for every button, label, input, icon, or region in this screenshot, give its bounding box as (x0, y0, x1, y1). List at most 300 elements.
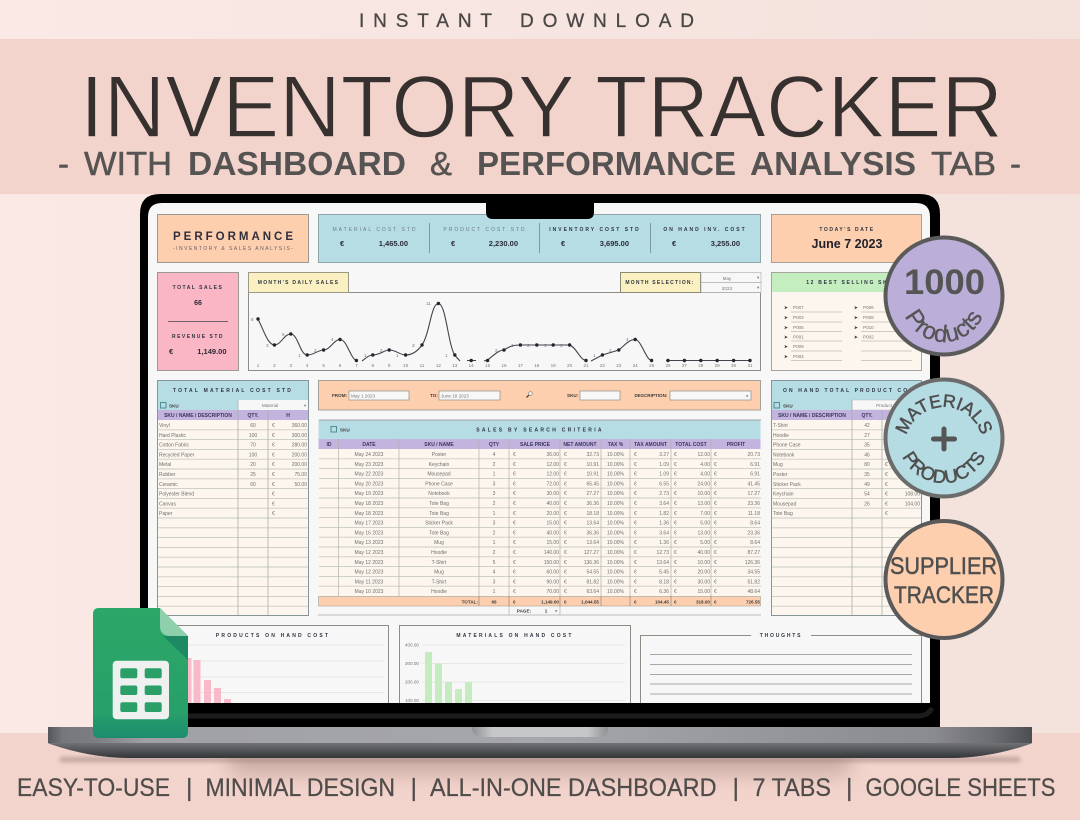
line chart: 8 (372, 363, 375, 368)
panel: on hand total product cost table: € (885, 472, 888, 478)
badge: materials + products: MATERIALS (895, 394, 992, 434)
table body rows: 10.00% (607, 550, 625, 556)
feature strip (17, 774, 1056, 802)
line chart: 30 (731, 363, 737, 368)
badge: materials + products: PRODUCTS (902, 450, 984, 483)
table body rows (355, 452, 760, 595)
table body rows: 3.27 (659, 452, 669, 458)
panel: on hand total product cost table: Notebook (773, 452, 795, 458)
table body rows: € (513, 570, 516, 576)
panel: performance title (158, 214, 308, 262)
table body rows: € (674, 570, 677, 576)
line chart: 14 (469, 363, 474, 368)
panel: on hand total product cost table: 35 (864, 472, 870, 478)
line chart: 26 (665, 363, 671, 368)
panel: materials on hand cost chart: 300.00 (405, 661, 419, 666)
table body rows: 2 (493, 550, 496, 556)
panel: search filters: TO: (430, 393, 438, 398)
table body rows: € (674, 472, 677, 478)
table body rows: May 17 2023 (355, 521, 384, 527)
panel: on hand total product cost table: Mousepad (773, 501, 797, 507)
badge: 1000 products: Products (905, 308, 982, 342)
table body rows: 4 (493, 452, 496, 458)
panel: total material cost table: TOTAL MATERIAL COST STD (173, 388, 293, 394)
table body rows: 3.64 (659, 530, 669, 536)
panel: total material cost table: Cotton Fabric (159, 443, 190, 449)
feature strip: GOOGLE SHEETS (866, 774, 1056, 802)
line chart: 10 (403, 363, 409, 368)
panel: total material cost table: € (272, 501, 275, 507)
line chart: 12 (436, 363, 441, 368)
line chart: 3 (527, 343, 530, 348)
feature strip: | (186, 774, 192, 802)
line chart: 21 (583, 363, 589, 368)
table body rows: 127.27 (584, 550, 599, 556)
table body rows: 1 (493, 472, 496, 478)
table body rows: 3 (493, 521, 496, 527)
table body rows: 3 (493, 481, 496, 487)
table body rows: € (634, 570, 637, 576)
table body rows: 10.00% (607, 511, 625, 517)
table body rows: 12.00 (697, 452, 710, 458)
table totals row: € (674, 600, 677, 604)
panel: on hand total product cost table: € (885, 462, 888, 468)
table body rows: 136.36 (584, 560, 599, 566)
table body rows: € (674, 530, 677, 536)
table body rows: 40.00 (697, 550, 710, 556)
table body rows: € (714, 452, 717, 458)
table body rows: 2.73 (659, 491, 669, 497)
table body rows: 10.00% (607, 472, 625, 478)
badge: 1000 products: 1000 (904, 263, 985, 302)
table body rows: 1 (493, 589, 496, 595)
line chart: 2 (273, 363, 276, 368)
table body rows: € (674, 589, 677, 595)
table body rows: € (714, 511, 717, 517)
panel: cost summary: € (561, 239, 566, 248)
table body rows: € (634, 530, 637, 536)
panel: on hand total product cost table: Mug (773, 462, 783, 468)
line chart: 5 (322, 363, 325, 368)
table body rows: 13.00 (697, 501, 710, 507)
table body rows: May 16 2023 (355, 530, 384, 536)
table body rows: € (513, 462, 516, 468)
table body rows: May 24 2023 (355, 452, 384, 458)
line chart: 4 (306, 363, 309, 368)
table body rows: 3 (493, 579, 496, 585)
subtitle: DASHBOARD (188, 145, 406, 182)
panel: on hand total product cost table: Product (876, 403, 893, 408)
panel: best selling skus: ➤ (784, 354, 789, 359)
panel: total material cost table: 25 (250, 472, 256, 478)
table body rows: 12.00 (546, 472, 559, 478)
table body rows: 54.55 (586, 570, 599, 576)
table body rows: 5.45 (659, 570, 669, 576)
line chart: 2 (380, 348, 383, 353)
table body rows: € (674, 501, 677, 507)
panel: best selling skus: ➤ (854, 315, 859, 320)
panel: total sales: 1,149.00 (197, 347, 226, 356)
line chart: 2 (314, 348, 317, 353)
panel: search filters: FROM: (332, 393, 348, 398)
line chart: 19 (551, 363, 556, 368)
panel: best selling skus: 12 BEST SELLING SKU (806, 280, 894, 286)
panel: total material cost table: Rubber (159, 472, 176, 478)
table body rows: 11.18 (748, 511, 760, 517)
subtitle: - (58, 145, 69, 182)
panel: thoughts (640, 633, 922, 705)
panel: materials on hand cost chart: 100.00 (405, 698, 419, 703)
table body rows: 36.36 (586, 530, 599, 536)
panel: total material cost table: H (286, 413, 290, 419)
line chart: 3 (290, 363, 293, 368)
subtitle: WITH (84, 145, 172, 182)
table body rows: 41.45 (747, 481, 760, 487)
panel: sales by search criteria table: SKU (340, 428, 350, 432)
table body rows: 65.45 (586, 481, 599, 487)
table body rows: Mug (434, 570, 444, 576)
table totals row: € (634, 600, 637, 604)
table body rows: T-Shirt (432, 560, 447, 566)
panel: total material cost table: 20 (250, 462, 256, 468)
panel: total sales: TOTAL SALES (173, 285, 223, 291)
table body rows: Hoodie (431, 589, 447, 595)
table body rows: € (714, 560, 717, 566)
panel: on hand total product cost table: Poster (773, 472, 788, 478)
panel: cost summary: PRODUCT COST STD (443, 227, 527, 233)
panel: on hand total product cost table: 35 (864, 443, 870, 449)
table body rows: 5.00 (700, 521, 710, 527)
table body rows: May 18 2023 (355, 501, 384, 507)
table body rows: € (714, 462, 717, 468)
panel: materials on hand cost chart: MATERIALS ON HAND COST (456, 633, 574, 639)
table body rows: € (564, 491, 567, 497)
panel: total sales: REVENUE STD (172, 334, 224, 340)
table body rows: € (634, 491, 637, 497)
badge: supplier tracker: TRACKER (894, 582, 994, 609)
panel: on hand total product cost table: SKU (783, 404, 793, 408)
table body rows: € (513, 452, 516, 458)
line chart: 15 (485, 363, 491, 368)
table body rows: 1 (493, 511, 496, 517)
panel: today's date: TODAY'S DATE (819, 227, 875, 233)
tab: month's daily sales: MONTH'S DAILY SALES (258, 280, 339, 286)
line chart: 11 (426, 301, 431, 306)
table body rows: € (513, 589, 516, 595)
table body rows: € (564, 550, 567, 556)
feature strip: MINIMAL DESIGN (206, 774, 395, 802)
table body rows: 8.64 (750, 521, 760, 527)
table totals row: 1,149.00 (541, 600, 559, 604)
tab: month selection (620, 272, 761, 292)
table body rows: Tote Bag (429, 530, 449, 536)
panel: total material cost table: SKU / NAME / DESCRIPTION (164, 413, 232, 419)
table header row: SKU / NAME (424, 442, 454, 448)
table body rows: 81.82 (586, 579, 599, 585)
tab: month selection: May (723, 276, 732, 281)
panel: cost summary: 3,255.00 (711, 239, 740, 248)
table body rows: € (513, 501, 516, 507)
line chart: 4 (626, 337, 629, 342)
table body rows: € (674, 491, 677, 497)
panel: cost summary (318, 214, 760, 262)
table body rows: € (634, 481, 637, 487)
table body rows: May 20 2023 (355, 481, 384, 487)
laptop base (48, 727, 1032, 758)
table body rows: 23.36 (747, 530, 760, 536)
panel: on hand total product cost table: 27 (864, 433, 870, 439)
table body rows: € (564, 521, 567, 527)
panel: total material cost table: Metal (159, 462, 171, 468)
badge: materials + products (884, 378, 1004, 498)
table header row: TAX % (608, 442, 624, 448)
table body rows: Phone Case (425, 481, 453, 487)
panel: best selling skus: P005 (793, 325, 804, 330)
panel: search filters: DESCRIPTION: (634, 393, 668, 398)
table body rows: 12.00 (546, 462, 559, 468)
icon: google sheets (93, 608, 188, 738)
table body rows: € (513, 540, 516, 546)
table body rows: € (634, 560, 637, 566)
panel: best selling skus: P008 (863, 315, 874, 320)
table body rows: € (674, 481, 677, 487)
top strap: instant download: INSTANT (359, 11, 492, 32)
table body rows: € (674, 462, 677, 468)
panel: sales by search criteria table (318, 420, 761, 615)
line chart: 23 (616, 363, 622, 368)
table header row: DATE (362, 442, 376, 448)
table totals row: 1,044.55 (581, 600, 599, 604)
table totals row: € (714, 600, 717, 604)
panel: total material cost table (158, 380, 309, 616)
panel: cost summary: € (340, 239, 345, 248)
table body rows: 15.00 (546, 540, 559, 546)
table body rows: 15.00 (697, 589, 710, 595)
line chart: 1 (593, 353, 596, 358)
laptop bezel (140, 194, 940, 727)
line chart: 13 (452, 363, 458, 368)
line chart: 28 (698, 363, 704, 368)
table body rows: 6.91 (750, 472, 760, 478)
table body rows: € (564, 560, 567, 566)
table body rows: 5.00 (700, 540, 710, 546)
table body rows: 32.73 (586, 452, 599, 458)
panel: best selling skus: ➤ (854, 325, 859, 330)
panel: products on hand cost chart (158, 626, 388, 706)
panel: on hand total product cost table: 80 (864, 462, 870, 468)
table body rows: € (714, 472, 717, 478)
table body rows: 40.00 (546, 501, 559, 507)
table body rows: € (513, 579, 516, 585)
table body rows: € (564, 511, 567, 517)
line chart: 1 (298, 353, 301, 358)
panel: best selling skus: P006 (863, 305, 874, 310)
feature strip: | (846, 774, 852, 802)
panel: on hand total product cost table: Hoodie (773, 433, 789, 439)
table body rows: € (513, 491, 516, 497)
table body rows: 10.00% (607, 540, 625, 546)
table body rows: 8.64 (750, 540, 760, 546)
trackpad notch (472, 727, 608, 737)
table body rows: 51.82 (747, 579, 760, 585)
panel: total material cost table: SKU (169, 404, 179, 408)
table body rows: 10.00 (697, 560, 710, 566)
panel: cost summary: 2,230.00 (489, 239, 518, 248)
panel: total material cost table: Hard Plastic (159, 433, 186, 439)
tab: month selection: 2023 (722, 286, 733, 291)
table body rows: 40.00 (546, 530, 559, 536)
panel: total material cost table: Canvas (159, 501, 176, 507)
line chart: 4 (331, 337, 334, 342)
panel: total material cost table: 100 (249, 452, 257, 458)
table body rows: 12.73 (656, 550, 669, 556)
feature strip: | (732, 774, 739, 802)
table body rows: € (634, 452, 637, 458)
panel: cost summary: 1,465.00 (379, 239, 408, 248)
panel: on hand total product cost table: 49 (864, 482, 870, 488)
line chart: 16 (501, 363, 507, 368)
table body rows: 6.55 (659, 481, 669, 487)
pager (318, 608, 761, 615)
panel: on hand total product cost table: € (885, 492, 888, 498)
table body rows: May 13 2023 (355, 540, 384, 546)
panel: search filters: May 1 2023 (351, 394, 375, 398)
line chart: 6 (339, 363, 342, 368)
panel: best selling skus: ➤ (784, 325, 789, 330)
table body rows: 27.27 (586, 491, 599, 497)
panel: total material cost table: € (272, 433, 275, 439)
subtitle: PERFORMANCE (477, 145, 736, 182)
panel: cost summary: MATERIAL COST STD (332, 227, 418, 233)
table body rows: 10.00% (607, 501, 625, 507)
panel: best selling skus: P007 (793, 305, 804, 310)
subtitle (58, 145, 1021, 182)
table body rows: 1.09 (659, 462, 669, 468)
panel: on hand total product cost table: QTY. (861, 413, 873, 419)
table body rows: Mug (434, 540, 444, 546)
table body rows: € (564, 462, 567, 468)
panel: on hand total product cost table: T-Shirt (773, 423, 788, 429)
table body rows: May 12 2023 (355, 550, 384, 556)
line chart: 3 (511, 343, 514, 348)
subtitle: TAB (931, 145, 996, 182)
table body rows: 8.18 (659, 579, 669, 585)
table body rows: € (674, 579, 677, 585)
line chart: 5 (282, 332, 285, 337)
table body rows: € (714, 570, 717, 576)
panel: on hand total product cost table: € (885, 511, 888, 517)
panel: search filters (318, 380, 760, 410)
panel: best selling skus: ➤ (784, 305, 789, 310)
panel: total material cost table: 360.00 (292, 423, 307, 429)
panel: cost summary: € (672, 239, 677, 248)
table body rows: 2 (493, 462, 496, 468)
table body rows: 2 (493, 530, 496, 536)
panel: on hand total product cost table: Phone Case (773, 443, 801, 449)
table body rows: 6.36 (659, 589, 669, 595)
table totals row: € (564, 600, 567, 604)
table totals row: 726.55 (746, 600, 760, 604)
panel: on hand total product cost table: 42 (864, 423, 870, 429)
table body rows: € (564, 589, 567, 595)
line chart: 31 (747, 363, 753, 368)
panel: materials on hand cost chart: 200.00 (405, 680, 419, 684)
top strap: instant download: DOWNLOAD (520, 11, 694, 32)
table body rows: 13.64 (656, 560, 669, 566)
panel: best selling skus (772, 272, 922, 370)
table header row: TOTAL COST (675, 442, 707, 448)
table body rows: 1.82 (659, 511, 669, 517)
feature strip: 7 TABS (752, 774, 831, 802)
line chart: 1 (445, 353, 448, 358)
panel: total material cost table: Ceramic (159, 482, 178, 488)
table body rows: € (674, 521, 677, 527)
panel: total material cost table: 280.00 (292, 443, 307, 449)
table body rows: 30.00 (697, 579, 710, 585)
table body rows: € (714, 521, 717, 527)
table header row: SALE PRICE (520, 442, 551, 448)
panel: total material cost table: 60 (250, 482, 256, 488)
table body rows: 1.36 (659, 521, 669, 527)
line chart: 18 (534, 363, 540, 368)
table body rows: € (714, 501, 717, 507)
table body rows: € (634, 540, 637, 546)
panel: best selling skus: P003 (793, 315, 804, 320)
pager: ▾ (555, 608, 558, 614)
top strap: instant download (359, 11, 694, 32)
panel: sales by search criteria table: SALES BY SEARCH CRITERIA (476, 428, 604, 434)
table body rows: 72.00 (546, 481, 559, 487)
table body rows: Notebook (428, 491, 450, 497)
table body rows: € (674, 550, 677, 556)
table body rows: € (564, 540, 567, 546)
table body rows: May 11 2023 (355, 579, 383, 585)
table body rows: € (564, 570, 567, 576)
panel: total sales: € (169, 347, 174, 356)
badge: supplier tracker: SUPPLIER (890, 553, 997, 580)
table body rows: 1.09 (659, 472, 669, 478)
table body rows: 140.00 (544, 550, 559, 556)
table body rows: 34.55 (747, 570, 760, 576)
table header row (326, 442, 745, 448)
table body rows: € (634, 589, 637, 595)
feature strip: | (410, 774, 417, 802)
panel: best selling skus: ➤ (784, 344, 789, 349)
panel: on hand total product cost table: € (885, 482, 888, 488)
table body rows: € (513, 472, 516, 478)
panel: best selling skus: P010 (863, 325, 874, 330)
table body rows: Keychain (429, 462, 449, 468)
table body rows: May 10 2023 (355, 589, 384, 595)
table body rows: 18.18 (586, 511, 599, 517)
table body rows: € (564, 452, 567, 458)
tab: month selection: MONTH SELECTION: (625, 280, 695, 286)
table body rows: € (714, 530, 717, 536)
table body rows: 24.00 (697, 481, 710, 487)
tab: month's daily sales (248, 272, 348, 292)
table body rows: 3.64 (659, 501, 669, 507)
panel: total material cost table: Recycled Paper (159, 452, 195, 458)
table body rows: € (513, 521, 516, 527)
table body rows: 23.36 (747, 501, 760, 507)
panel: cost summary: ON HAND INV. COST (663, 227, 747, 233)
panel: on hand total product cost table: SKU / NAME / DESCRIPTION (778, 413, 846, 419)
panel: on hand total product cost table: Tote Bag (773, 511, 793, 517)
panel: search filters: ▾ (746, 394, 749, 398)
panel: total material cost table: 75.00 (294, 472, 307, 478)
table header row: ID (326, 442, 332, 448)
table body rows: 63.64 (586, 589, 599, 595)
